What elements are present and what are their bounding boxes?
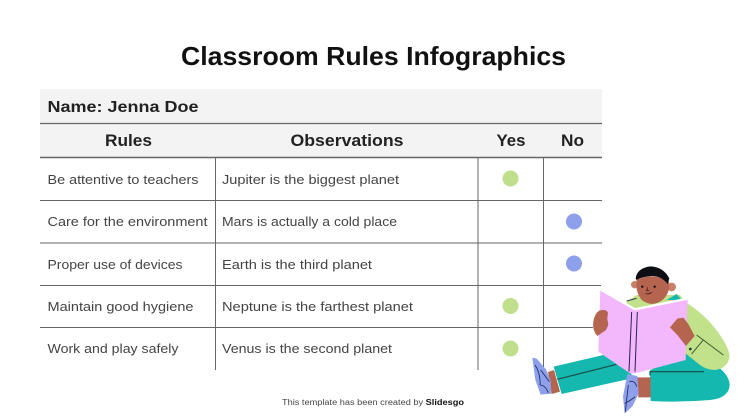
title: Classroom Rules Infographics <box>181 41 566 71</box>
illustration: child reading a book <box>532 266 733 417</box>
observations column text: Neptune is the farthest planet <box>222 299 413 314</box>
shoes <box>532 358 551 395</box>
observations column text: Mars is actually a cold place <box>222 214 397 229</box>
column headings: Observations <box>290 132 404 150</box>
torso <box>627 295 720 373</box>
rules column text <box>48 172 208 356</box>
left hand <box>593 310 608 336</box>
yes and no markers <box>502 170 582 356</box>
feet <box>548 370 560 394</box>
name heading: Name: Jenna Doe <box>48 99 199 116</box>
rules column text: Maintain good hygiene <box>48 299 194 314</box>
column headings: Yes <box>496 132 526 150</box>
column headings: Rules <box>105 132 152 150</box>
observations column text: Jupiter is the biggest planet <box>222 172 399 187</box>
column headings: No <box>561 132 584 150</box>
rules column text: Care for the environment <box>48 214 208 229</box>
rules column text: Proper use of devices <box>48 257 183 272</box>
near leg <box>650 350 730 402</box>
rules column text: Work and play safely <box>48 341 179 356</box>
table header background <box>40 89 602 157</box>
panel: rules table <box>40 89 602 370</box>
footer credit: This template has been created by Slidesgo <box>282 398 464 407</box>
book <box>598 289 688 373</box>
far leg <box>554 355 632 394</box>
right hand <box>670 318 695 346</box>
observations column text <box>222 172 413 356</box>
rules column text: Be attentive to teachers <box>48 172 199 187</box>
observations column text: Earth is the third planet <box>222 257 372 272</box>
sleeve <box>683 303 729 370</box>
head <box>631 266 676 304</box>
white backing behind figure <box>593 285 733 417</box>
column headings <box>105 132 584 150</box>
observations column text: Venus is the second planet <box>222 341 392 356</box>
